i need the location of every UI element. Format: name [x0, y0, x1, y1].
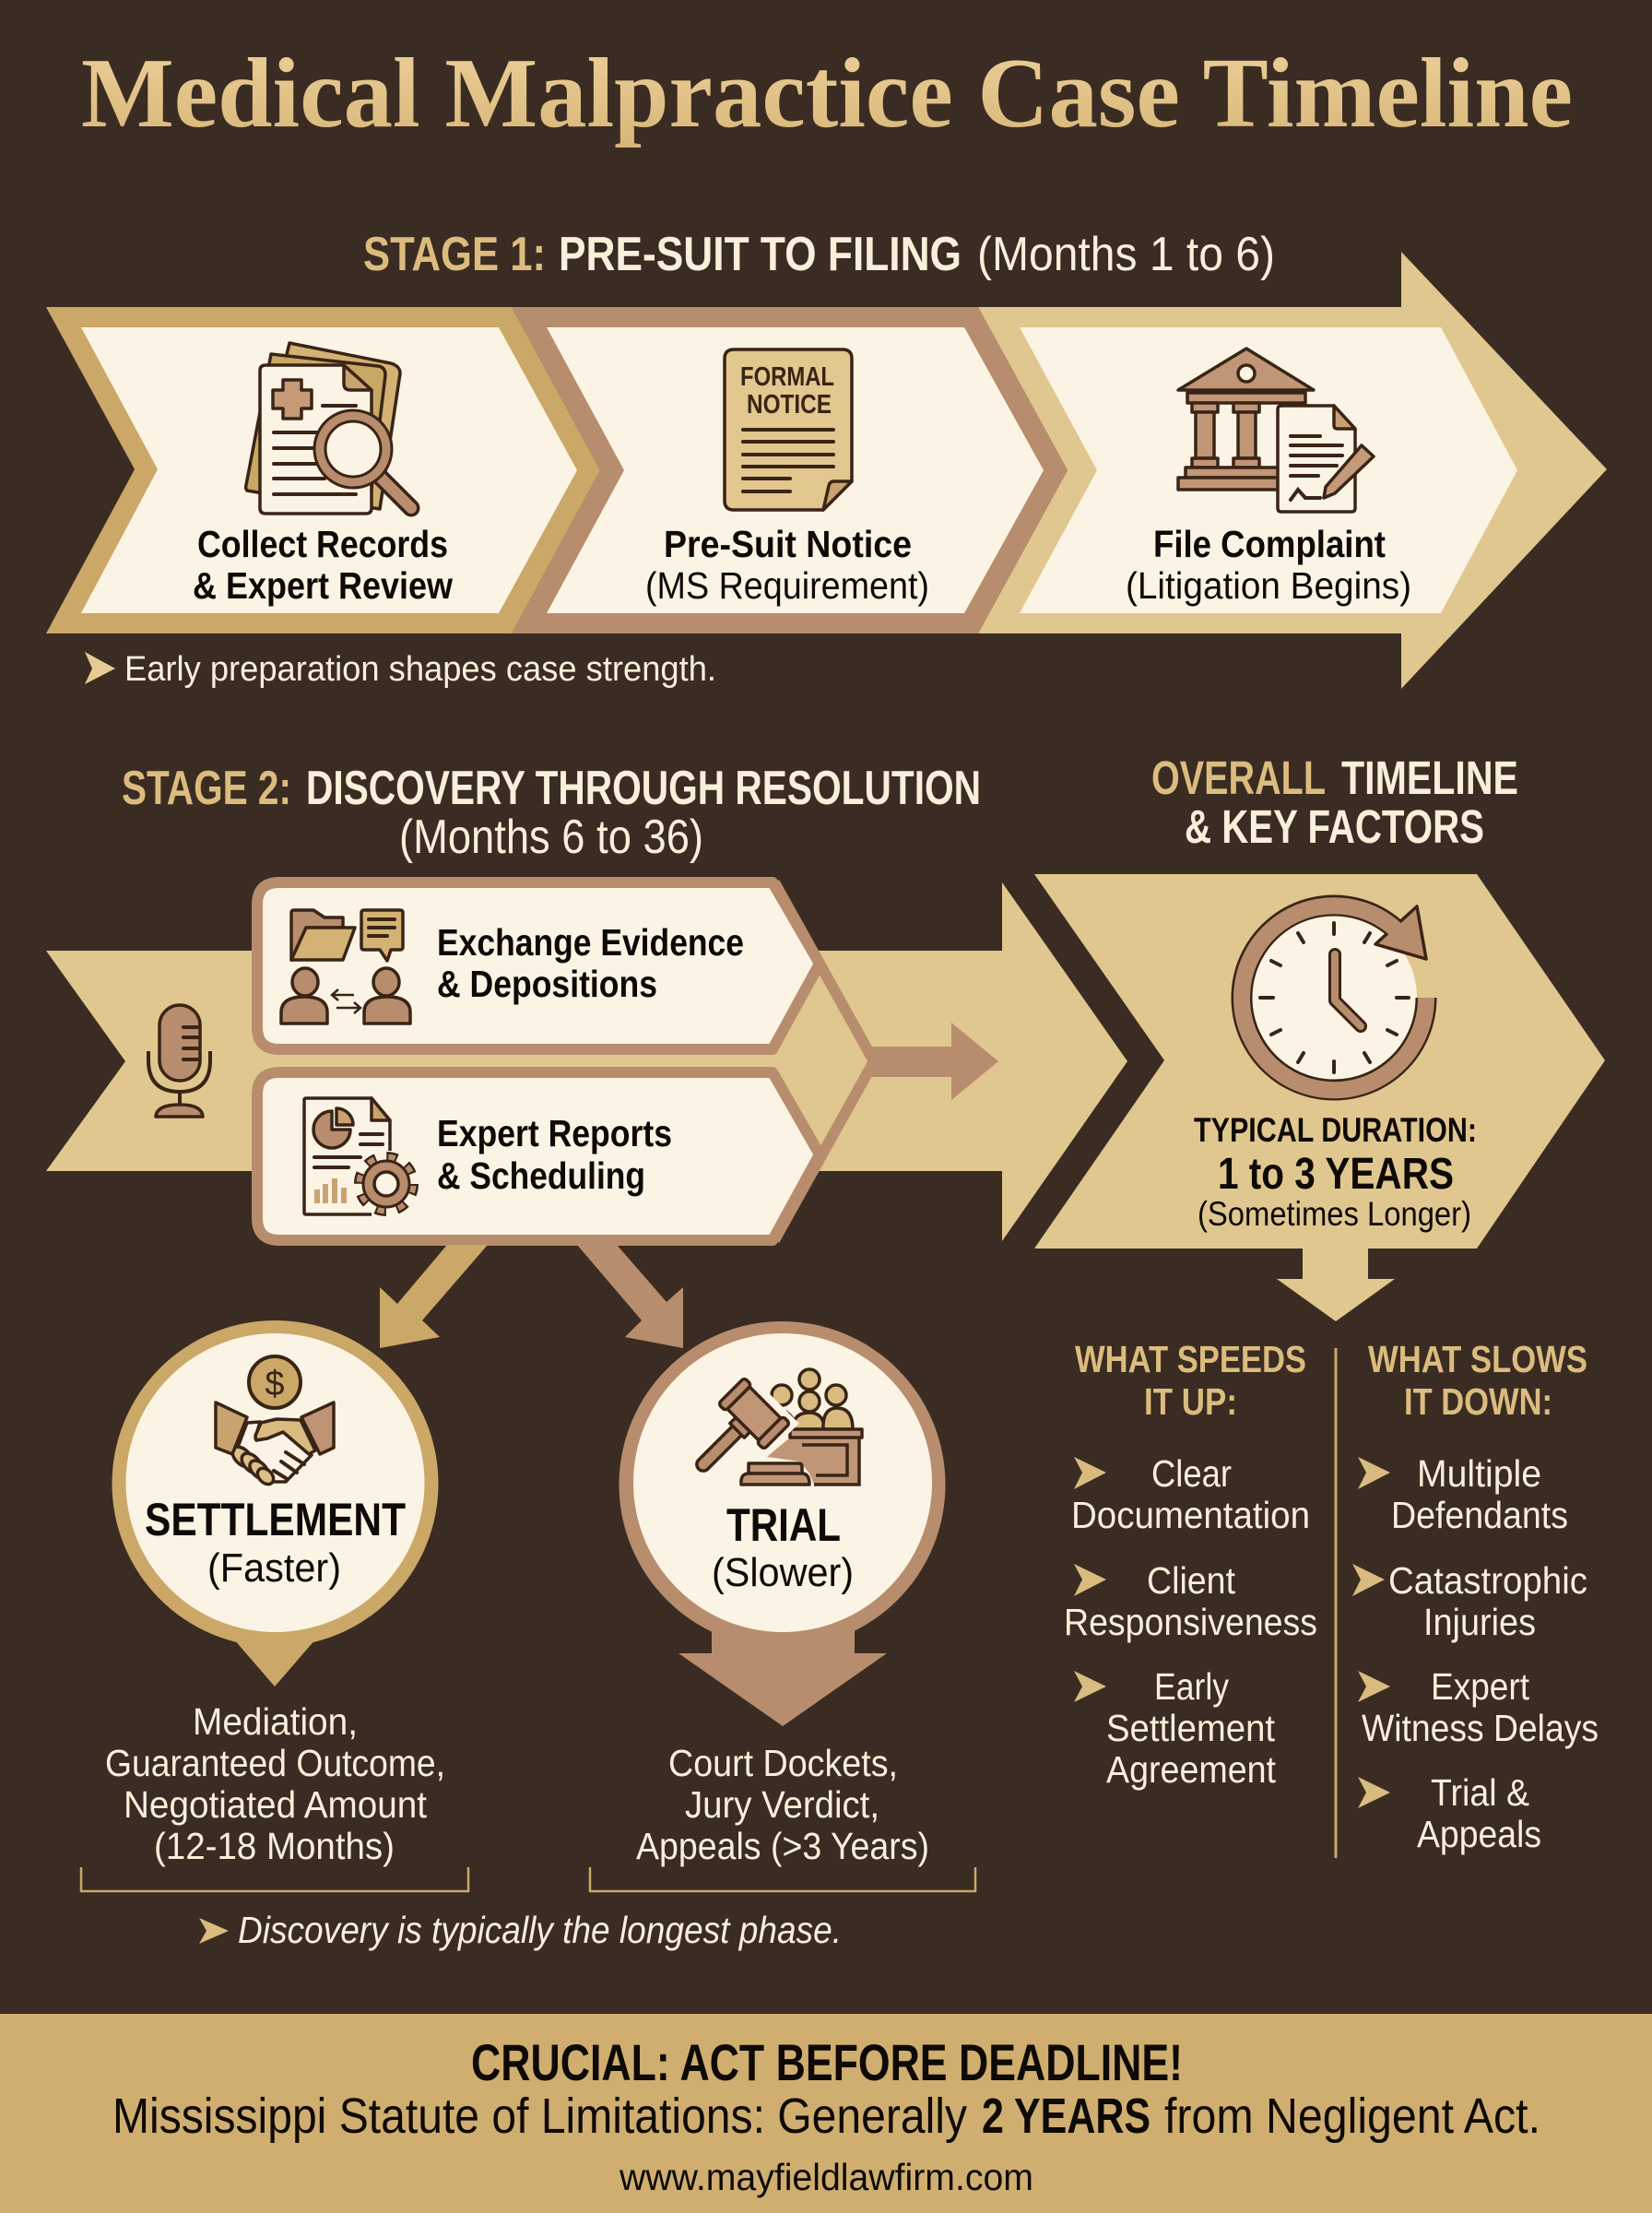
heading: stage 2: DISCOVERY THROUGH RESOLUTION — [306, 762, 981, 815]
text: typical duration: TYPICAL DURATION: — [1194, 1111, 1477, 1149]
text: settlement details: Mediation, — [193, 1700, 358, 1743]
card: exchange evidence — [257, 882, 820, 1049]
heading: stage 2: STAGE 2: — [122, 762, 291, 815]
text: exchange evidence: & Depositions — [437, 963, 657, 1005]
panel: trial — [620, 1321, 946, 1726]
text: collect records: & Expert Review — [193, 564, 453, 607]
heading: what speeds it up — [1075, 1338, 1306, 1423]
icon: clock — [1242, 905, 1426, 1090]
item: clear documentation: Clear — [1151, 1452, 1232, 1495]
panel: stage 2 arrow — [46, 882, 1127, 1241]
icon: formal notice document: FORMAL — [740, 362, 834, 392]
text: file complaint: File Complaint — [1153, 523, 1386, 565]
item: catastrophic injuries: Injuries — [1423, 1601, 1536, 1643]
item: clear documentation — [1071, 1452, 1310, 1536]
footer website: www.mayfieldlawfirm.com — [619, 2156, 1033, 2198]
item: client responsiveness: Responsiveness — [1064, 1601, 1317, 1643]
item: multiple defendants — [1358, 1452, 1568, 1536]
icon: microphone — [148, 1005, 210, 1117]
heading: stage 1 — [363, 228, 1275, 281]
text: trial details: Jury Verdict, — [685, 1783, 879, 1826]
text: file complaint: (Litigation Begins) — [1126, 564, 1411, 607]
heading: overall timeline: OVERALL — [1151, 751, 1326, 804]
text: trial details — [636, 1742, 929, 1867]
item: trial and appeals: Appeals — [1417, 1813, 1541, 1855]
panel: what speeds it up — [1064, 1338, 1317, 1791]
heading: stage 1: PRE-SUIT TO FILING — [559, 228, 962, 281]
heading: overall timeline: TIMELINE — [1341, 751, 1518, 804]
text: collect records — [193, 523, 453, 607]
item: trial and appeals: Trial & — [1431, 1771, 1529, 1814]
text: expert reports — [437, 1112, 672, 1197]
icon: formal notice document — [725, 349, 852, 510]
footer statute text: from Negligent Act. — [1164, 2089, 1540, 2144]
item: expert witness delays: Witness Delays — [1362, 1707, 1599, 1749]
item: early settlement agreement — [1074, 1665, 1277, 1791]
icon: folder speech bubble and people — [281, 910, 410, 1024]
heading: what slows it down: WHAT SLOWS — [1368, 1338, 1587, 1380]
text: trial details: Court Dockets, — [668, 1742, 898, 1784]
text: trial: (Slower) — [712, 1550, 854, 1595]
footer heading: CRUCIAL: ACT BEFORE DEADLINE! — [471, 2033, 1183, 2091]
arrow: to trial — [577, 1245, 683, 1348]
text: exchange evidence — [437, 921, 744, 1005]
card: pre-suit notice — [547, 327, 1044, 613]
title: Medical Malpractice Case Timeline — [81, 39, 1573, 148]
text: settlement details: (12-18 Months) — [154, 1825, 395, 1867]
icon: handshake and coin: $ — [265, 1365, 285, 1403]
heading: what speeds it up: IT UP: — [1144, 1380, 1237, 1423]
text: expert reports: & Scheduling — [437, 1154, 645, 1197]
text: typical duration: 1 to 3 YEARS — [1218, 1150, 1454, 1199]
item: early settlement agreement: Settlement — [1106, 1707, 1276, 1749]
card: collect records — [81, 327, 577, 613]
text: settlement details: Negotiated Amount — [124, 1783, 428, 1826]
text: typical duration — [1194, 1111, 1477, 1233]
icon: handshake and coin — [216, 1356, 334, 1487]
panel: overall timeline — [1034, 874, 1605, 1321]
text: typical duration: (Sometimes Longer) — [1198, 1195, 1471, 1233]
icon: courthouse and signed document — [1178, 349, 1374, 512]
arrow: merge to resolution — [871, 1023, 998, 1100]
item: client responsiveness: Client — [1147, 1559, 1236, 1602]
panel: stage 1 arrow — [46, 252, 1607, 689]
panel: settlement — [112, 1320, 439, 1686]
text: collect records: Collect Records — [197, 523, 448, 565]
text: expert reports: Expert Reports — [437, 1112, 672, 1154]
heading: stage 2 — [122, 762, 981, 864]
text: file complaint — [1126, 523, 1411, 607]
footer statute text: 2 YEARS — [982, 2089, 1150, 2144]
item: multiple defendants: Multiple — [1417, 1452, 1541, 1495]
text: trial: TRIAL — [726, 1499, 841, 1551]
item: client responsiveness — [1064, 1559, 1317, 1643]
footer statute text: Mississippi Statute of Limitations: Generally — [112, 2089, 967, 2144]
callout: early preparation: Early preparation shapes case strength. — [124, 650, 716, 689]
text: exchange evidence: Exchange Evidence — [437, 921, 744, 964]
footer statute text — [112, 2089, 1540, 2144]
heading: what slows it down — [1368, 1338, 1587, 1423]
callout: discovery phase: Discovery is typically the longest phase. — [238, 1909, 842, 1951]
item: early settlement agreement: Agreement — [1106, 1748, 1277, 1791]
text: settlement: SETTLEMENT — [145, 1494, 406, 1545]
arrow: to settlement — [380, 1245, 488, 1348]
heading: stage 1: (Months 1 to 6) — [977, 228, 1275, 281]
item: expert witness delays — [1358, 1665, 1599, 1749]
heading: what slows it down: IT DOWN: — [1404, 1380, 1552, 1423]
icon: gavel and jury — [671, 1368, 862, 1497]
footer banner — [0, 2014, 1652, 2213]
item: catastrophic injuries: Catastrophic — [1388, 1559, 1587, 1602]
text: pre-suit notice — [645, 523, 929, 607]
text: trial — [712, 1499, 854, 1595]
text: trial details: Appeals (>3 Years) — [636, 1825, 929, 1867]
item: clear documentation: Documentation — [1071, 1494, 1310, 1536]
text: settlement details: Guaranteed Outcome, — [105, 1742, 445, 1784]
heading: stage 2: (Months 6 to 36) — [399, 811, 703, 864]
card: expert reports — [257, 1072, 820, 1240]
item: early settlement agreement: Early — [1154, 1665, 1229, 1708]
text: pre-suit notice: Pre-Suit Notice — [664, 523, 912, 565]
connector: chevron outline around cards — [774, 882, 874, 1240]
heading: what speeds it up: WHAT SPEEDS — [1075, 1338, 1306, 1380]
icon: report with pie chart and gear — [304, 1098, 412, 1214]
icon: formal notice document: NOTICE — [747, 390, 832, 420]
heading: overall timeline: & KEY FACTORS — [1185, 800, 1484, 853]
item: trial and appeals — [1358, 1771, 1541, 1855]
item: multiple defendants: Defendants — [1391, 1494, 1568, 1536]
icon: records and magnifier — [246, 343, 411, 514]
item: expert witness delays: Expert — [1431, 1665, 1530, 1708]
heading: overall timeline — [1151, 751, 1518, 853]
panel: what slows it down — [1352, 1338, 1599, 1855]
text: pre-suit notice: (MS Requirement) — [645, 564, 929, 607]
card: file complaint — [1020, 327, 1517, 613]
heading: stage 1: STAGE 1: — [363, 228, 546, 281]
item: catastrophic injuries — [1352, 1559, 1587, 1643]
text: settlement details — [105, 1700, 445, 1867]
text: settlement — [145, 1494, 406, 1591]
text: settlement: (Faster) — [207, 1545, 341, 1591]
